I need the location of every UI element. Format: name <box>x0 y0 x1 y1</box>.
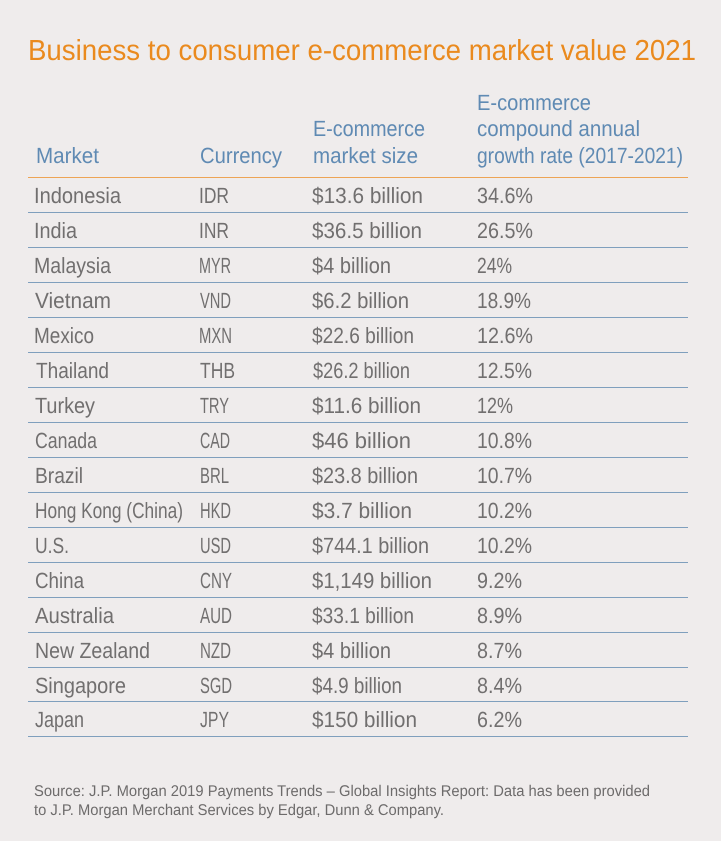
row: Singapore: 8.4% <box>477 673 522 698</box>
source note <box>34 783 650 819</box>
row: Indonesia: IDR <box>199 183 229 208</box>
row: New Zealand: 8.7% <box>477 638 522 663</box>
row: Malaysia: MYR <box>199 253 231 278</box>
table <box>28 90 688 737</box>
row: U.S. <box>35 533 532 558</box>
row: Vietnam: VND <box>200 288 231 313</box>
row: China: CNY <box>200 568 232 593</box>
row: China: China <box>35 568 85 593</box>
row: U.S.: $744.1 billion <box>312 533 429 558</box>
row: New Zealand <box>35 638 522 663</box>
row: India: 26.5% <box>477 218 533 243</box>
row: Canada <box>35 428 532 453</box>
row: Singapore: $4.9 billion <box>312 673 402 698</box>
row: Australia: AUD <box>200 603 232 628</box>
row: Brazil: 10.7% <box>477 463 532 488</box>
row: China: $1,149 billion <box>312 568 432 593</box>
row: Hong Kong (China): HKD <box>200 498 231 523</box>
row: Hong Kong (China): Hong Kong (China) <box>35 498 183 523</box>
row: Mexico: $22.6 billion <box>312 323 414 348</box>
row: Hong Kong (China): 10.2% <box>477 498 532 523</box>
row: Malaysia: $4 billion <box>312 253 391 278</box>
row: Japan: $150 billion <box>312 707 417 732</box>
row: Thailand: $26.2 billion <box>313 358 410 383</box>
row: Indonesia: $13.6 billion <box>312 183 423 208</box>
row: Singapore: SGD <box>200 673 232 698</box>
row: Thailand <box>36 358 532 383</box>
row: Turkey: Turkey <box>35 393 95 418</box>
row: Vietnam <box>35 288 531 313</box>
row: India: $36.5 billion <box>312 218 422 243</box>
row: China: 9.2% <box>477 568 522 593</box>
row: Vietnam: 18.9% <box>477 288 531 313</box>
row: Canada: CAD <box>200 428 230 453</box>
table header row: Market <box>36 143 99 168</box>
row: Canada: Canada <box>35 428 98 453</box>
row: Australia <box>35 603 522 628</box>
row: Turkey <box>35 393 513 418</box>
row: Mexico: 12.6% <box>477 323 533 348</box>
source note: Source: J.P. Morgan 2019 Payments Trends – Global Insights Report: Data has been provided <box>34 783 650 800</box>
table header row: E-commerce <box>477 90 591 115</box>
table header row: Currency <box>200 143 282 168</box>
row: Australia: 8.9% <box>477 603 522 628</box>
row: Singapore <box>35 673 522 698</box>
row: Mexico <box>34 323 533 348</box>
row: Brazil: BRL <box>200 463 229 488</box>
row: Malaysia: Malaysia <box>34 253 112 278</box>
row: Brazil: $23.8 billion <box>312 463 418 488</box>
row: India: INR <box>199 218 229 243</box>
title: Business to consumer e-commerce market value 2021 <box>28 35 696 67</box>
table header row: E-commerce <box>313 116 425 141</box>
row: Mexico: MXN <box>199 323 232 348</box>
row: Vietnam: Vietnam <box>35 288 111 313</box>
table header row: growth rate (2017-2021) <box>477 143 683 168</box>
row: Japan: 6.2% <box>477 707 522 732</box>
row: India <box>34 218 533 243</box>
row: Indonesia: 34.6% <box>477 183 533 208</box>
row: Thailand: Thailand <box>36 358 109 383</box>
row: Japan: Japan <box>35 707 84 732</box>
table header row: compound annual <box>477 116 640 141</box>
row: Turkey: 12% <box>477 393 513 418</box>
table header row <box>36 90 683 168</box>
row: Brazil: Brazil <box>35 463 83 488</box>
row: Thailand: THB <box>200 358 235 383</box>
row: Malaysia <box>34 253 512 278</box>
row: Turkey: $11.6 billion <box>312 393 421 418</box>
row: Japan: JPY <box>200 707 229 732</box>
row: Indonesia: Indonesia <box>34 183 122 208</box>
row: Brazil <box>35 463 532 488</box>
row: India: India <box>34 218 78 243</box>
row: Canada: $46 billion <box>312 428 411 453</box>
row: Australia: $33.1 billion <box>312 603 414 628</box>
row: Singapore: Singapore <box>35 673 126 698</box>
table header row: market size <box>313 143 418 168</box>
row: Hong Kong (China) <box>35 498 532 523</box>
row: Vietnam: $6.2 billion <box>312 288 409 313</box>
row: Malaysia: 24% <box>477 253 512 278</box>
row: China <box>35 568 522 593</box>
row: U.S.: U.S. <box>35 533 69 558</box>
row: Canada: 10.8% <box>477 428 532 453</box>
row: Thailand: 12.5% <box>477 358 532 383</box>
row: New Zealand: New Zealand <box>35 638 150 663</box>
row: Mexico: Mexico <box>34 323 94 348</box>
row: Hong Kong (China): $3.7 billion <box>312 498 412 523</box>
row: U.S.: USD <box>200 533 231 558</box>
row: Japan <box>35 707 522 732</box>
row: Australia: Australia <box>35 603 115 628</box>
row: Turkey: TRY <box>200 393 229 418</box>
row: New Zealand: $4 billion <box>312 638 391 663</box>
row: New Zealand: NZD <box>200 638 231 663</box>
row: U.S.: 10.2% <box>477 533 532 558</box>
source note: to J.P. Morgan Merchant Services by Edgar, Dunn & Company. <box>34 802 444 819</box>
row: Indonesia <box>34 183 533 208</box>
